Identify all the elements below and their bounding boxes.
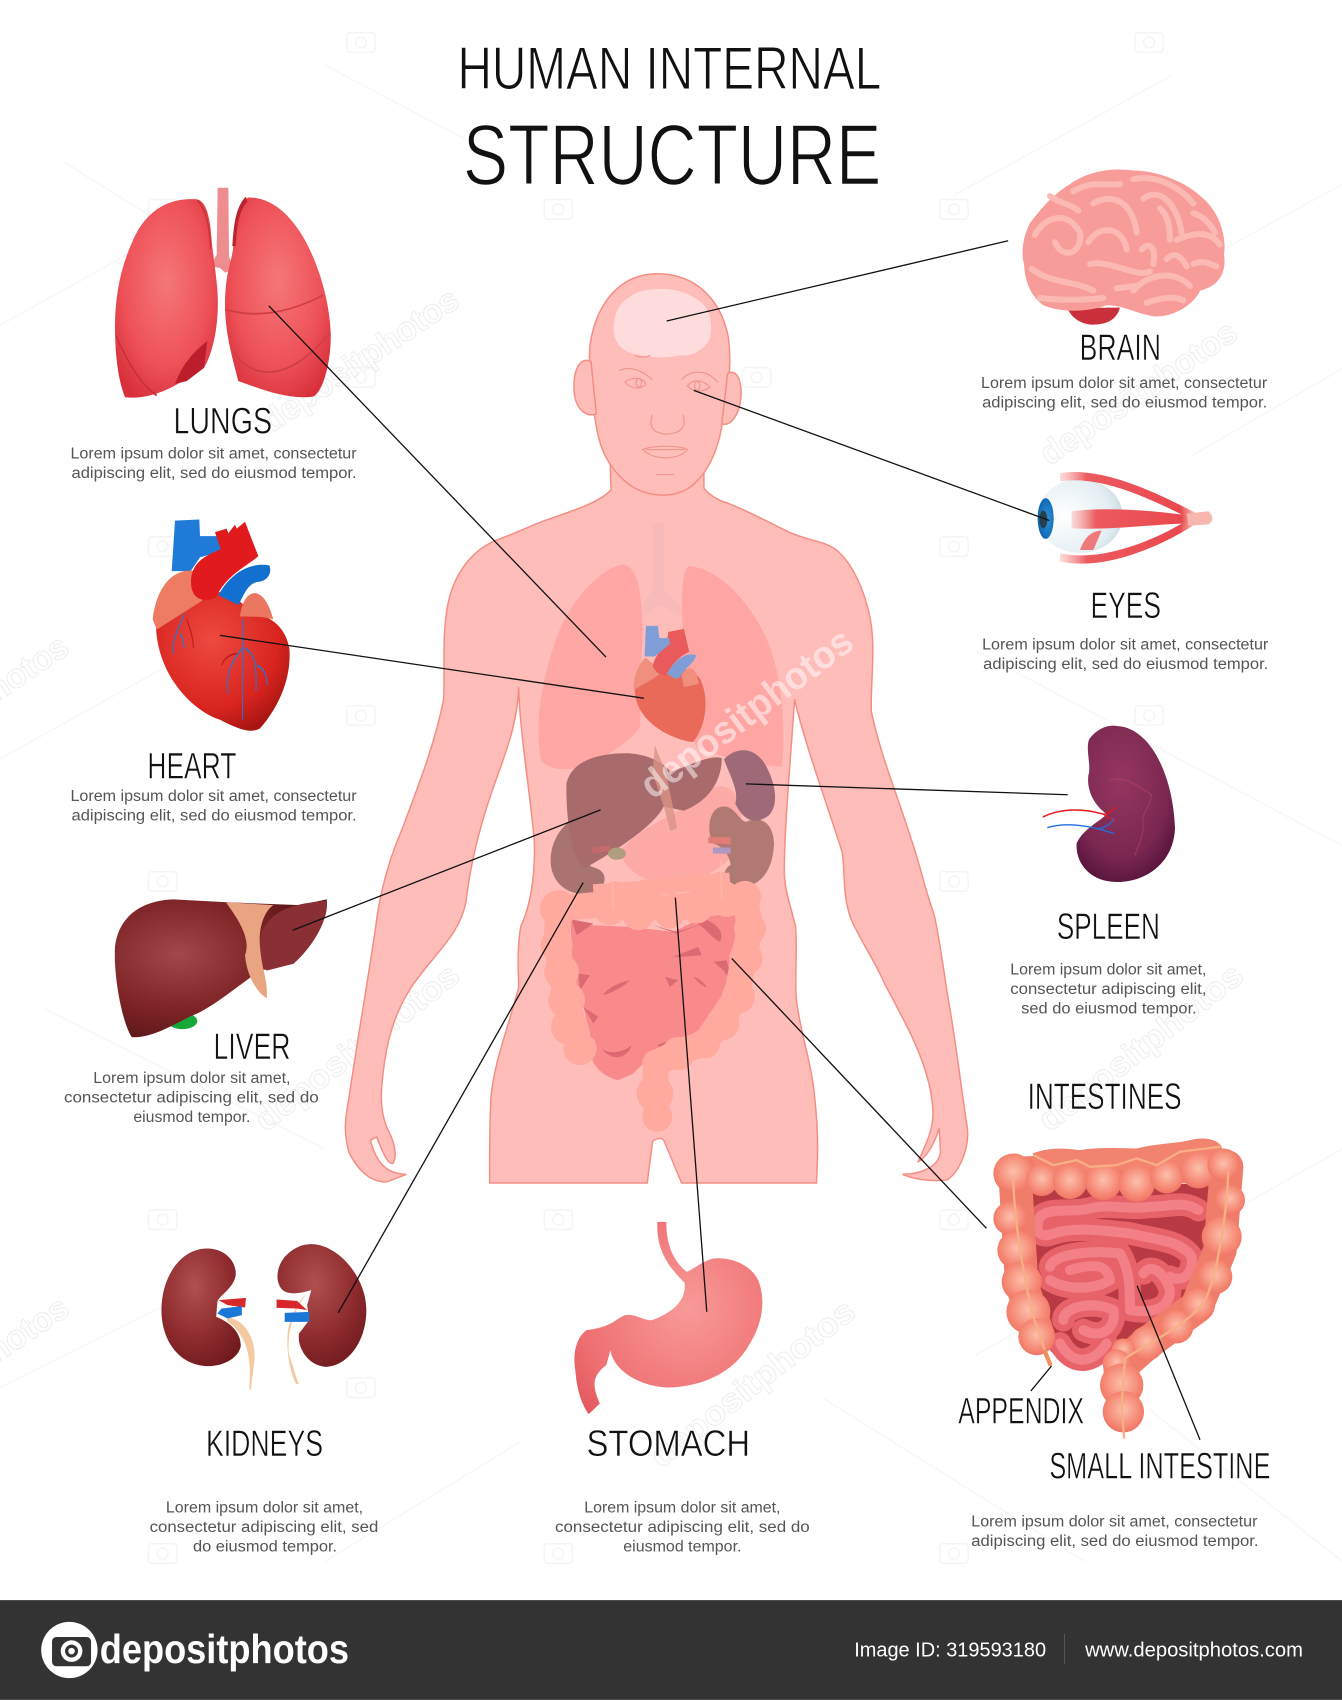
- right kidney: [709, 806, 774, 886]
- label: heart: [70, 745, 357, 825]
- coronary vessels: [173, 614, 267, 720]
- stock watermarks: depositphotos: [255, 281, 466, 440]
- human body figure: [345, 274, 968, 1183]
- label: liver: Lorem ipsum dolor sit amet,: [93, 1070, 291, 1087]
- spleen illustration: [1043, 726, 1175, 882]
- leader lines: [220, 241, 1200, 1440]
- right lung: [225, 197, 331, 397]
- liver lobes: [115, 899, 327, 1037]
- colon right side: [1215, 1185, 1245, 1215]
- vena cava: [172, 519, 223, 571]
- left kidney: [161, 1248, 241, 1366]
- label: brain: [981, 327, 1267, 412]
- trachea: [210, 188, 234, 273]
- label: heart: adipiscing elit, sed do eiusmod tempor.: [72, 808, 357, 825]
- iris: [1038, 498, 1054, 539]
- optic nerve: [1187, 511, 1212, 526]
- center watermark: depositphotos: [632, 620, 861, 807]
- stock watermarks: depositphotos: [643, 1293, 863, 1475]
- aorta: [191, 522, 258, 600]
- gyri: [1032, 178, 1220, 303]
- gall bladder: [167, 1013, 197, 1029]
- liver illustration: [115, 899, 327, 1037]
- stock watermarks: depositphotos: [1031, 957, 1251, 1139]
- atria: [153, 570, 207, 630]
- small intestine loops: [1038, 1205, 1198, 1360]
- label: kidneys: consectetur adipiscing elit, sed: [150, 1519, 378, 1536]
- left lung: [115, 199, 218, 398]
- label: spleen: [1010, 906, 1206, 1018]
- image id: Image ID: 319593180: [854, 1639, 1046, 1662]
- colon pouches: [993, 1149, 1245, 1432]
- label: stomach: eiusmod tempor.: [623, 1538, 741, 1555]
- label: lungs: adipiscing elit, sed do eiusmod tempor.: [72, 465, 357, 482]
- small intestine base: [1027, 1183, 1213, 1365]
- label: lungs: Lorem ipsum dolor sit amet, consectetur: [70, 446, 357, 463]
- gall bladder and vessels: [592, 837, 731, 860]
- heart illustration: [153, 519, 290, 731]
- right ear: [722, 372, 741, 424]
- brain outline: [614, 289, 711, 357]
- eyeball: [1037, 479, 1123, 553]
- label: heart: HEART: [147, 745, 236, 786]
- lungs: [538, 565, 783, 769]
- label: eyes: Lorem ipsum dolor sit amet, consectetur: [982, 636, 1268, 653]
- ureters: [227, 1317, 255, 1389]
- sigmoid colon: [1100, 1363, 1143, 1407]
- appendix tip: [1045, 1352, 1050, 1364]
- label: liver: [64, 1026, 319, 1126]
- colon: [540, 872, 766, 1132]
- stomach ghost: [619, 786, 742, 883]
- label: brain: Lorem ipsum dolor sit amet, consectetur: [981, 375, 1267, 392]
- pulmonary artery: [218, 565, 270, 605]
- footer logo text: depositphotos: [100, 1626, 349, 1672]
- label: eyes: EYES: [1091, 585, 1161, 626]
- label: intestines: adipiscing elit, sed do eiusmod tempor.: [971, 1533, 1259, 1550]
- label: intestines: [958, 1076, 1270, 1550]
- body silhouette: [345, 464, 968, 1183]
- label: stomach: Lorem ipsum dolor sit amet,: [584, 1499, 780, 1516]
- head: [589, 274, 730, 495]
- label: kidneys: [150, 1423, 378, 1555]
- label: spleen: Lorem ipsum dolor sit amet,: [1010, 962, 1206, 979]
- small intestine: [571, 912, 742, 1080]
- footer bar: [0, 1600, 1342, 1700]
- body intestines: [540, 860, 766, 1132]
- label: liver: eiusmod tempor.: [133, 1109, 250, 1126]
- colon backing: [1015, 1165, 1227, 1413]
- label: kidneys: do eiusmod tempor.: [193, 1538, 337, 1555]
- label: intestines: INTESTINES: [1028, 1076, 1182, 1117]
- footer logo icon: [41, 1622, 98, 1678]
- lungs illustration: [115, 188, 331, 398]
- colon bands: [1013, 1147, 1228, 1438]
- label: eyes: [982, 585, 1268, 673]
- stock watermarks: depositphotos: [1033, 314, 1244, 473]
- stock watermarks: depositphotos: [248, 957, 467, 1139]
- label: stomach: [555, 1423, 810, 1555]
- ligament: [226, 902, 273, 998]
- label: brain: BRAIN: [1080, 327, 1161, 368]
- falciform ligament: [653, 745, 677, 831]
- label: intestines: APPENDIX: [958, 1390, 1084, 1431]
- colon left side: [993, 1202, 1027, 1235]
- eye muscles: [1060, 476, 1193, 559]
- label: liver: LIVER: [214, 1026, 291, 1067]
- right kidney: [277, 1244, 366, 1367]
- title: HUMAN INTERNAL: [457, 34, 881, 102]
- label: brain: adipiscing elit, sed do eiusmod tempor.: [982, 395, 1267, 412]
- heart: [634, 626, 705, 742]
- label: spleen: sed do eiusmod tempor.: [1021, 1001, 1197, 1018]
- stomach illustration: [574, 1222, 762, 1414]
- title: STRUCTURE: [463, 106, 881, 203]
- liver: [566, 753, 722, 868]
- title: [457, 34, 881, 203]
- label: stomach: consectetur adipiscing elit, sed do: [555, 1519, 810, 1536]
- left kidney: [551, 813, 605, 894]
- site url: www.depositphotos.com: [1084, 1639, 1303, 1662]
- label: heart: Lorem ipsum dolor sit amet, consectetur: [70, 788, 357, 805]
- label: spleen: consectetur adipiscing elit,: [1010, 981, 1206, 998]
- brain illustration: [1023, 169, 1225, 325]
- renal vessels: [219, 1298, 307, 1310]
- label: stomach: STOMACH: [586, 1423, 750, 1464]
- intestines illustration: [993, 1138, 1245, 1438]
- trachea: [641, 523, 682, 617]
- label: liver: consectetur adipiscing elit, sed do: [64, 1090, 319, 1107]
- label: spleen: SPLEEN: [1057, 906, 1160, 947]
- label: lungs: LUNGS: [173, 401, 272, 442]
- label: eyes: adipiscing elit, sed do eiusmod tempor.: [983, 656, 1268, 673]
- label: intestines: Lorem ipsum dolor sit amet, consectetur: [971, 1513, 1257, 1530]
- ventricles: [156, 591, 290, 731]
- label: kidneys: KIDNEYS: [206, 1423, 323, 1464]
- cerebrum: [1023, 169, 1225, 316]
- brain stem: [1068, 308, 1120, 325]
- face features: [619, 355, 718, 475]
- label: lungs: [70, 401, 357, 482]
- left ear: [574, 360, 596, 415]
- eye illustration: [1037, 476, 1212, 559]
- kidneys illustration: [161, 1244, 366, 1389]
- spleen: [724, 750, 775, 821]
- label: kidneys: Lorem ipsum dolor sit amet,: [166, 1499, 363, 1516]
